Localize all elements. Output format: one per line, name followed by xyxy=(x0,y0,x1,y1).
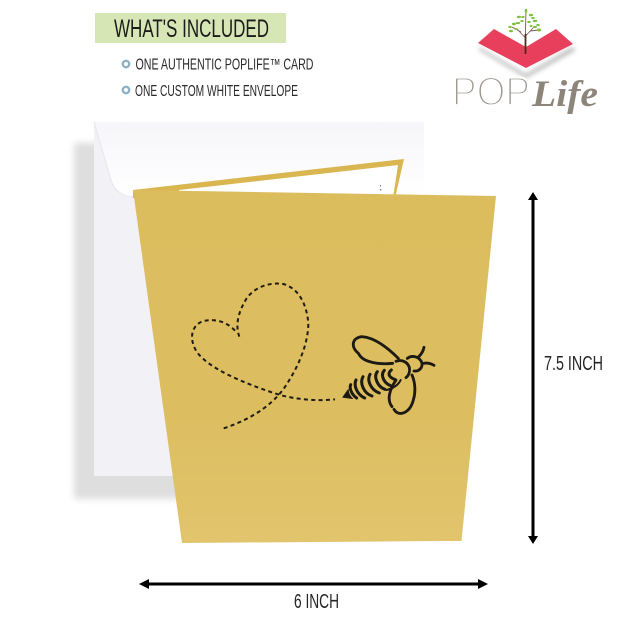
thorax and head xyxy=(396,361,410,378)
lower wing xyxy=(389,380,396,407)
logo wordmark: Life: Life xyxy=(531,74,598,115)
list item: envelope: ONE CUSTOM WHITE ENVELOPE xyxy=(135,83,298,100)
antennae xyxy=(419,347,424,357)
card inner page xyxy=(179,165,398,198)
upper wing xyxy=(353,337,398,358)
list item: card xyxy=(123,56,314,74)
card xyxy=(133,159,496,543)
logo: PopLife xyxy=(452,9,598,115)
inner page specks xyxy=(380,185,381,190)
card back panel xyxy=(133,159,404,198)
panel: what's included xyxy=(95,13,314,100)
label: width: 6 INCH xyxy=(294,590,339,613)
heart flight trail xyxy=(192,284,335,429)
envelope flap xyxy=(94,122,424,197)
arrow: width xyxy=(139,579,488,589)
heading: what's included xyxy=(95,13,286,43)
card front xyxy=(133,190,496,543)
envelope body xyxy=(94,122,424,476)
arrow: height xyxy=(528,192,538,544)
logo wordmark: POP: POP xyxy=(452,70,530,114)
icon: bee xyxy=(343,337,434,413)
list item: envelope xyxy=(123,83,298,100)
list item: card: ONE AUTHENTIC POPLIFE™ CARD xyxy=(136,56,314,74)
icon: red open book shadow xyxy=(479,47,576,78)
abdomen stripes xyxy=(389,370,395,379)
envelope xyxy=(74,122,424,499)
icon: red open book xyxy=(478,29,573,68)
envelope shadow xyxy=(74,143,364,499)
icon: tree xyxy=(508,9,541,54)
heading: what's included: WHAT'S INCLUDED xyxy=(114,15,269,43)
